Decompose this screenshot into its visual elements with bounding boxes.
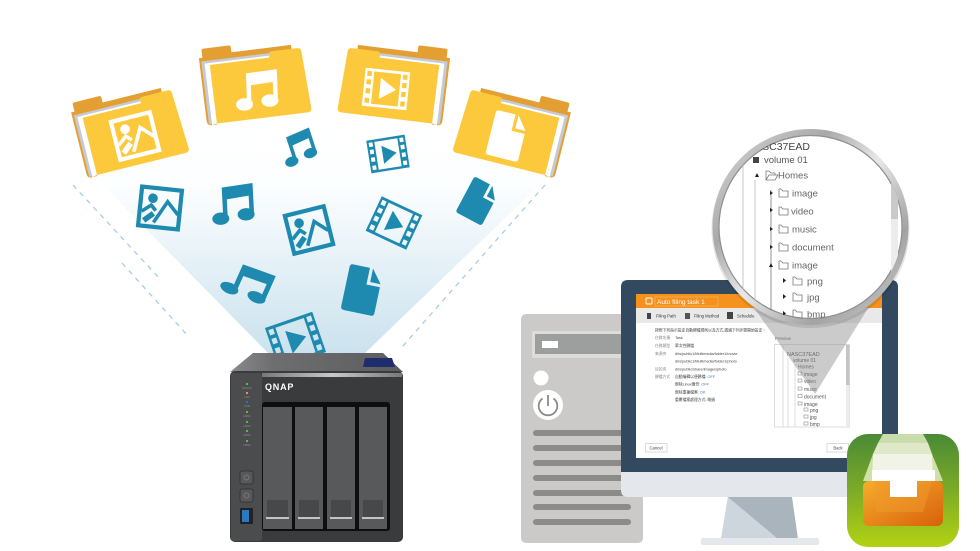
front buttons (240, 471, 253, 502)
dashed guide lines (73, 185, 545, 347)
status LEDs: HDD2 (243, 424, 251, 428)
status LEDs: HDD3 (243, 433, 251, 437)
toolbar: Filing Method (694, 314, 720, 318)
lens tree content: image (792, 260, 818, 272)
lens tree content: Homes (778, 170, 808, 182)
icon: image centre (285, 206, 333, 254)
icon: document on folder (485, 110, 529, 162)
preview tree box: image (804, 372, 818, 378)
monitor chin (621, 470, 898, 497)
preview tree box: png (810, 408, 819, 414)
icon: image on folder (111, 112, 159, 160)
icon: document right (456, 176, 500, 226)
icon: video on folder (362, 68, 410, 110)
back button: Back (833, 446, 844, 450)
power button (533, 390, 563, 420)
PC tower (521, 314, 643, 543)
drawer (863, 481, 943, 526)
folder: music (198, 36, 312, 126)
screen (636, 294, 882, 458)
lens tree content: music (792, 224, 817, 236)
drive trays (263, 407, 387, 529)
drive bay (262, 402, 390, 531)
form text (655, 328, 766, 402)
form text: Task (675, 336, 683, 340)
magnifying lens (712, 129, 910, 328)
folder: image (69, 78, 190, 178)
drive slot (532, 331, 632, 358)
form text: 自動編輯以便歸檔: OFF (675, 374, 716, 379)
floating media icons (138, 127, 500, 368)
toolbar: Filing Path (656, 314, 676, 318)
NAS sticker (363, 358, 395, 367)
status LEDs (242, 383, 252, 447)
cancel button: Cancel (649, 446, 663, 450)
NAS body (230, 371, 403, 542)
form text: 目的夾 (655, 366, 667, 372)
icon: music centre-left (211, 183, 255, 225)
lens tree content: image (792, 188, 818, 200)
lens tree content: video (791, 206, 814, 218)
magnifier projection cone (752, 305, 870, 394)
lens tree content: volume 01 (764, 155, 808, 166)
white index card (872, 470, 935, 497)
preview label: Preview (775, 336, 792, 341)
form text: 歸檔方式 (655, 374, 670, 379)
form text: 重覆檔案處理方式: 略過 (675, 397, 715, 402)
preview tree box: volume 01 (793, 358, 816, 364)
monitor (621, 280, 898, 545)
lens tree content: NASC37EAD (748, 141, 810, 153)
USB port (240, 508, 253, 524)
status LEDs: HDD4 (243, 443, 251, 447)
paper stack (878, 434, 928, 443)
NAS top face (230, 353, 403, 372)
form text: 任務名稱 (655, 335, 670, 340)
icon: music on folder (235, 69, 279, 111)
status LEDs: STATUS (242, 386, 252, 390)
preview tree box: NASC37EAD (787, 352, 820, 358)
back button (827, 444, 848, 452)
form text: 按照下列指示設定自動歸檔規則以及方式,透過下列步驟開始設定。 (655, 328, 766, 332)
folder: video (337, 36, 451, 126)
light cone from folders to NAS (93, 125, 552, 355)
toolbar (636, 308, 882, 323)
icon: music lower (218, 257, 276, 309)
vent bars (533, 430, 631, 525)
monitor bezel (621, 280, 898, 472)
form text: 任務類型 (655, 343, 670, 348)
cancel button (646, 444, 667, 452)
monitor stand (701, 497, 819, 545)
app icon: file drawer (847, 434, 959, 547)
preview tree box: Homes (798, 364, 814, 370)
icon: video right (366, 196, 422, 250)
toolbar: Schedule (737, 314, 755, 318)
lens tree content (743, 130, 898, 325)
icon: document lower (341, 264, 383, 316)
preview tree box: video (804, 379, 816, 385)
icon: image left (138, 187, 182, 229)
lens tree content: bmp (807, 310, 825, 320)
form text: dirs/public1/Multimedia/folder1/photo (675, 360, 737, 364)
status LEDs: USB (244, 404, 250, 408)
preview tree box: music (804, 387, 818, 393)
icon: video small (366, 135, 410, 173)
preview tree box: document (804, 394, 827, 400)
preview tree box (774, 344, 850, 428)
form text: 刪除Linux備份: OFF (675, 382, 710, 386)
form text: dirs/public1/Multimedia/folder1/movie (675, 352, 737, 356)
status LEDs: HDD1 (243, 414, 251, 418)
folder: document (452, 78, 573, 178)
preview tree box: jpg (809, 415, 817, 421)
preview tree box: bmp (810, 422, 820, 428)
form text: dirs/public/share/images/photo (675, 368, 726, 372)
icon: music small (277, 127, 319, 168)
app title bar (636, 294, 882, 308)
form text: 單次性歸檔 (675, 343, 694, 348)
QNAP logo: QNAP (265, 382, 294, 392)
indicator light (534, 370, 548, 386)
preview tree box: image (804, 402, 818, 408)
icon: video entering NAS (265, 312, 326, 368)
form text: 刪除重複檔案: OK (675, 390, 706, 394)
lens tree content: jpg (806, 292, 820, 304)
lens tree content: document (792, 242, 834, 254)
NAS device (230, 353, 403, 542)
status LEDs: LAN (244, 395, 250, 399)
app title bar: Auto filing task 1 (657, 299, 705, 306)
lens tree content: png (807, 276, 823, 288)
form text: 來源夾 (655, 351, 667, 356)
